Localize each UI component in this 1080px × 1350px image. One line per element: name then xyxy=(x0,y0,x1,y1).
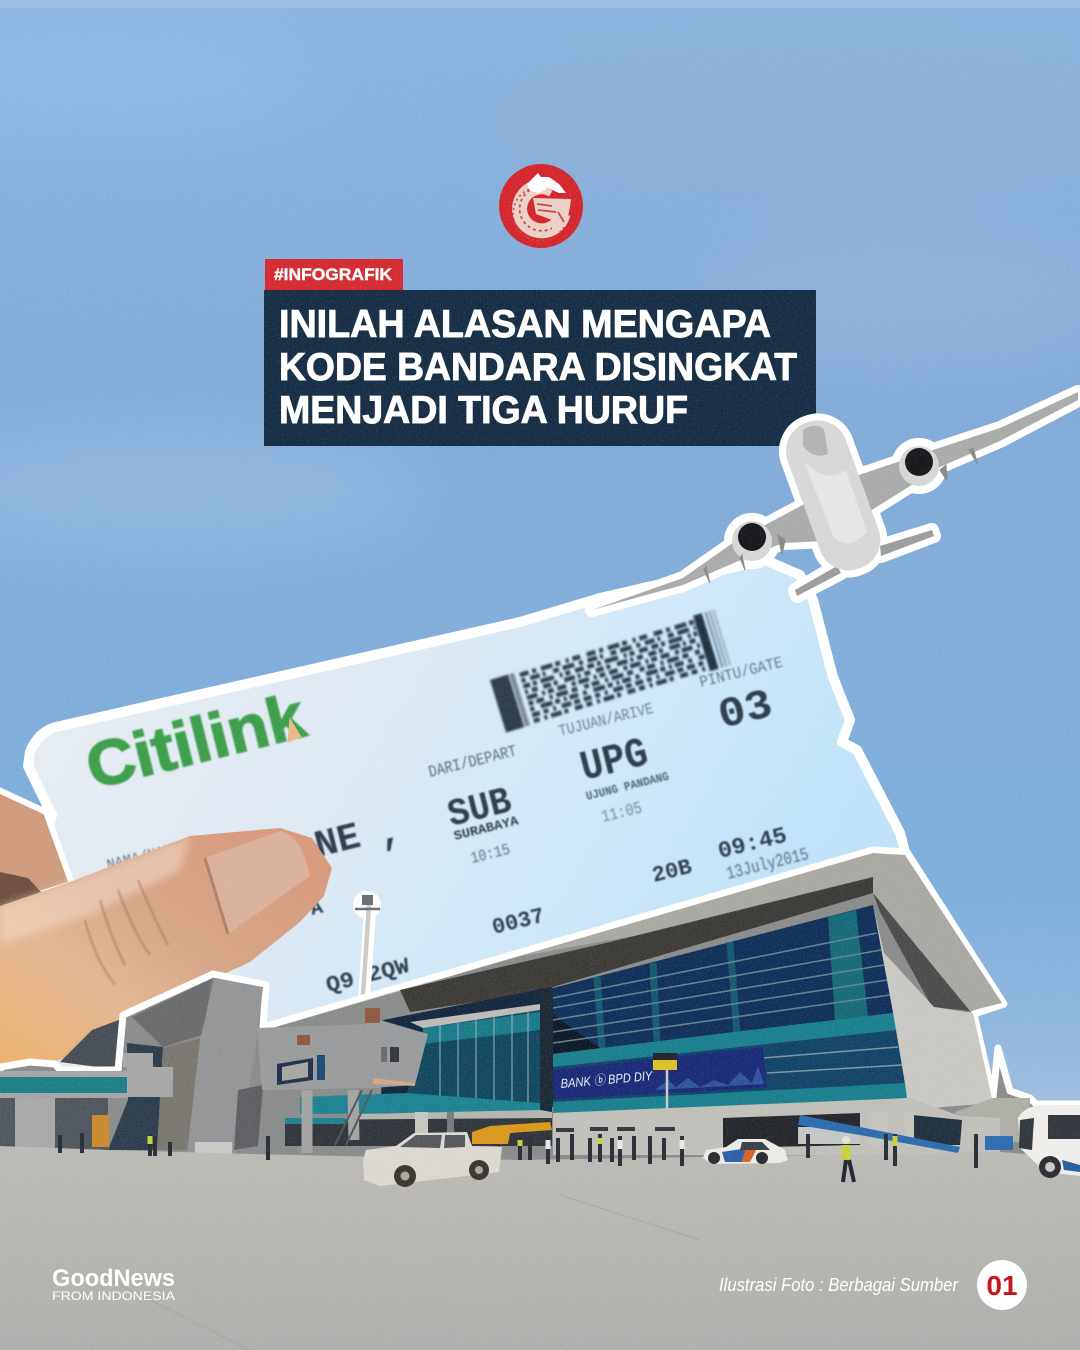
ticket text: , xyxy=(374,810,406,858)
ticket text: 10:15 xyxy=(469,841,512,868)
gate sign xyxy=(653,1053,677,1140)
tag: #INFOGRAFIK: #INFOGRAFIK xyxy=(274,265,393,284)
airport terminal building xyxy=(0,850,1080,1170)
sky bridge xyxy=(0,1071,128,1098)
ground floor xyxy=(553,1098,1000,1155)
boarding pass xyxy=(0,560,905,1090)
tag: #INFOGRAFIK xyxy=(265,259,403,290)
apron ground xyxy=(0,1146,1080,1350)
ticket text: 03 xyxy=(714,681,778,741)
title block: INILAH ALASAN MENGAPA xyxy=(279,303,771,346)
people on apron xyxy=(60,1133,976,1182)
lower glass xyxy=(553,1030,905,1102)
upper glass facade xyxy=(553,905,893,1054)
title block: KODE BANDARA DISINGKAT xyxy=(279,346,797,389)
ticket text: SUB xyxy=(444,780,516,838)
ticket text: NAMA/NAME xyxy=(105,840,183,874)
police car xyxy=(703,1139,788,1164)
jet bridge xyxy=(257,1008,428,1090)
airline logo: Citilink xyxy=(79,681,313,803)
ticket text: A xyxy=(308,897,325,922)
page number: 01 xyxy=(986,1270,1018,1301)
left glass hall xyxy=(380,987,552,1145)
ticket text: TUJUAN/ARIVE xyxy=(557,700,655,741)
roof xyxy=(275,853,1002,1027)
ticket text: UJUNG PANDANG xyxy=(585,770,670,804)
title block: MENJADI TIGA HURUF xyxy=(279,389,688,432)
ticket text: 20B xyxy=(650,855,695,889)
lower teal band xyxy=(553,1083,907,1113)
white van xyxy=(1018,1105,1080,1178)
ticket text: NE xyxy=(311,816,365,869)
ticket text: 0037 xyxy=(490,904,547,941)
ticket text: UPG xyxy=(576,730,653,793)
teal band xyxy=(553,1013,896,1067)
light pole xyxy=(353,891,381,1010)
brand: GoodNews from Indonesia: FROM INDONESIA xyxy=(52,1289,175,1303)
page number xyxy=(977,1260,1027,1310)
photo credit: Ilustrasi Foto : Berbagai Sumber xyxy=(719,1275,959,1295)
ticket text xyxy=(105,654,811,999)
side wall xyxy=(873,905,993,1110)
ticket text: 11:05 xyxy=(600,799,644,828)
ticket text: SURABAYA xyxy=(452,813,520,844)
bank banner: BANK ⓑ BPD DIY xyxy=(560,1068,654,1091)
ticket text: DARI/DEPART xyxy=(427,742,519,782)
concrete tower xyxy=(132,978,213,1047)
ticket text: 13July2015 xyxy=(725,845,811,885)
barcode xyxy=(489,609,731,734)
hand holding the ticket xyxy=(0,785,332,1070)
title block xyxy=(264,290,816,446)
logo: GNFI emblem xyxy=(499,164,583,248)
brand: GoodNews from Indonesia: GoodNews xyxy=(52,1265,175,1292)
ticket text: 09:45 xyxy=(715,823,790,865)
ticket text: PINTU/GATE xyxy=(698,654,785,692)
ticket text: Q9 2QW xyxy=(324,954,413,999)
white pickup truck xyxy=(363,1132,502,1187)
airplane xyxy=(592,392,1078,610)
bank banner xyxy=(553,1047,767,1099)
